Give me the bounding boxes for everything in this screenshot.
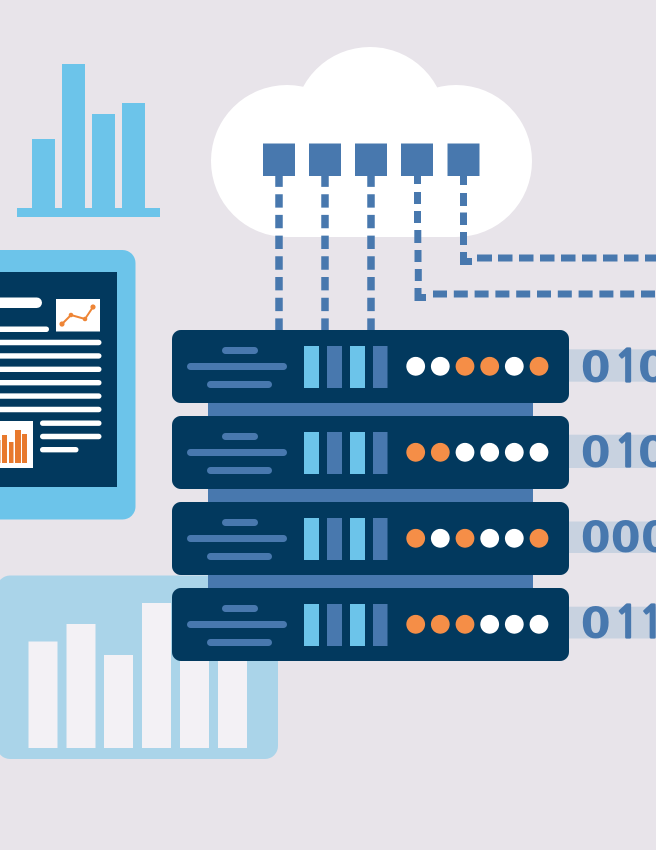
bar chart: top left <box>17 64 160 217</box>
server unit 3 <box>172 502 569 575</box>
dashed connectors <box>279 176 656 331</box>
binary label 2 <box>569 428 656 478</box>
cloud <box>211 47 532 237</box>
binary label 4: 0 <box>581 599 611 649</box>
server unit 2 <box>172 416 569 489</box>
bar chart thumbnail <box>0 421 33 468</box>
report text lines <box>0 298 102 452</box>
binary label 4 <box>569 599 656 649</box>
binary label 2: 1 <box>614 429 641 474</box>
binary label 2: 0 <box>581 428 611 478</box>
binary label 1: 1 <box>614 344 641 389</box>
binary label 1: 0 <box>581 343 611 393</box>
binary labels <box>569 343 656 649</box>
panel: tablet report <box>0 250 136 520</box>
binary label 4: 1 <box>614 600 641 645</box>
server rack connectors <box>208 400 533 592</box>
cloud nodes <box>263 144 480 176</box>
server unit 1 <box>172 330 569 403</box>
panel: pale bar chart <box>0 576 278 759</box>
server unit 4 <box>172 588 569 661</box>
binary label 1 <box>569 343 656 393</box>
line chart thumbnail <box>56 299 100 332</box>
